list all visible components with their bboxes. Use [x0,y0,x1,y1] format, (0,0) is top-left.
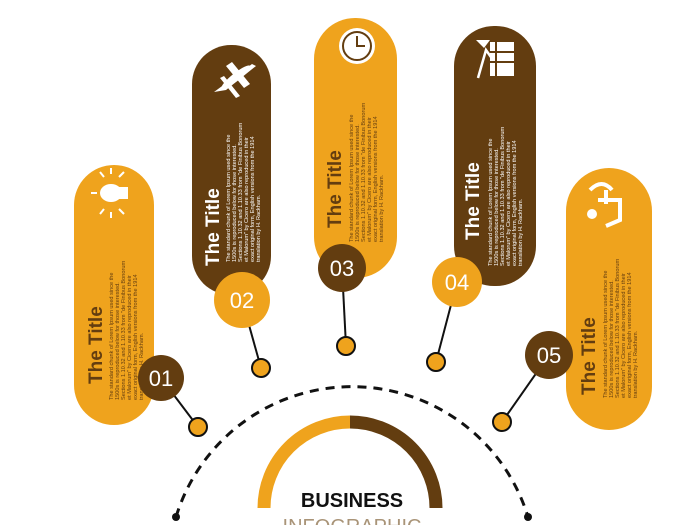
badge 02 [214,272,270,328]
panel 2: et Malorum" by Cicero are also reproduced in their [244,137,250,262]
panel 2: The standard chunk of Lorem Ipsum used since the [226,134,232,262]
body 1: 1500s is reproduced below for those interested. [115,282,121,400]
badge 01 [138,355,184,401]
panel 5 [566,168,652,430]
panel 5: 1500s is reproduced below for those interested. [609,280,615,398]
panel 3: et Malorum" by Cicero are also reproduced in their [367,117,373,242]
icon: chart [476,40,514,78]
badge 04 [432,257,482,307]
badge 02: 02 [230,288,254,313]
badge 01: 01 [149,366,173,391]
panel 3: translation by H. Rackham. [379,174,385,242]
badge 03: 03 [330,256,354,281]
title 2: The Title [203,188,224,266]
end dots [172,513,532,521]
title 3: The Title [325,150,346,228]
body 1 [109,261,145,400]
body 1: et Malorum" by Cicero are also reproduced in their [127,275,133,400]
panel 4: The standard chunk of Lorem Ipsum used since the [488,138,494,266]
panel 5: translation by H. Rackham. [633,330,639,398]
badge 04: 04 [445,270,469,295]
panel 3 [314,18,397,278]
panel 2: exact original form, English versions from the 1914 [250,136,256,262]
badge 05: 05 [537,343,561,368]
icon: hand [587,184,620,226]
panel 1 [74,165,154,425]
panel 4: exact original form, English versions from the 1914 [512,140,518,266]
center half ring [264,422,436,508]
title 4: The Title [463,162,484,240]
panel 3: exact original form, English versions from the 1914 [373,116,379,242]
heading: BUSINESS [301,490,403,512]
icon: clock [339,28,375,64]
icon: lightbulb [91,168,128,218]
panel 4: 1500s is reproduced below for those interested. [494,148,500,266]
panel 4: translation by H. Rackham. [518,198,524,266]
panel 4 [454,26,536,286]
panel 5: Sections 1.10.32 and 1.10.33 from "de Finibus Bonorum [615,259,621,398]
dashed arc [176,387,528,517]
panel 5: exact original form, English versions from the 1914 [627,272,633,398]
panel 2 [192,45,271,295]
arc dots [189,337,511,436]
panel 3: Sections 1.10.32 and 1.10.33 from "de Finibus Bonorum [361,103,367,242]
icon: airplane [214,62,256,98]
connector lines [161,268,549,427]
badge 03 [318,244,366,292]
panel 2: translation by H. Rackham. [256,194,262,262]
badge 05 [525,331,573,379]
panel 3: 1500s is reproduced below for those interested. [355,124,361,242]
panel 2: 1500s is reproduced below for those interested. [232,144,238,262]
body 1: Sections 1.10.32 and 1.10.33 from "de Finibus Bonorum [121,261,127,400]
body 1: translation by H. Rackham. [139,332,145,400]
panel 4: et Malorum" by Cicero are also reproduced in their [506,141,512,266]
panel 4: Sections 1.10.32 and 1.10.33 from "de Finibus Bonorum [500,127,506,266]
panel 5: The standard chunk of Lorem Ipsum used since the [603,270,609,398]
heading [283,490,421,525]
title 1: The Title [86,306,107,384]
body 1: The standard chunk of Lorem Ipsum used since the [109,272,115,400]
panel 5: et Malorum" by Cicero are also reproduced in their [621,273,627,398]
title 5: The Title [579,317,600,395]
body 1: exact original form, English versions from the 1914 [133,274,139,400]
panel 3: The standard chunk of Lorem Ipsum used since the [349,114,355,242]
panel 2: Sections 1.10.32 and 1.10.33 from "de Finibus Bonorum [238,123,244,262]
